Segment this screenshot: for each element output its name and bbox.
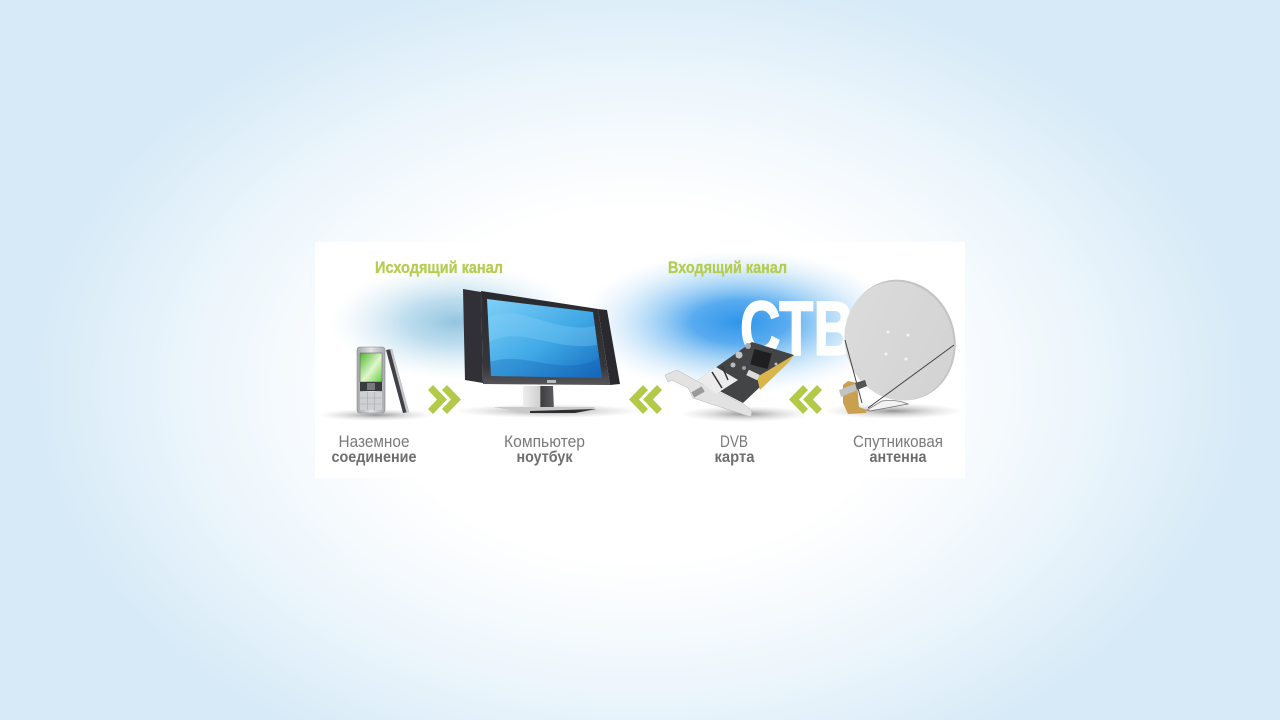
icon: satellite dish xyxy=(834,280,956,418)
label: computer notebook xyxy=(505,436,584,466)
arrow: right chevrons xyxy=(428,385,461,414)
large label: СТВ: СТВ xyxy=(740,286,854,372)
icon: mobile phone xyxy=(327,346,426,420)
icon: DVB card xyxy=(665,342,810,422)
label: landline connection xyxy=(332,436,416,466)
label: landline connection: соединение xyxy=(332,449,417,466)
label: DVB card xyxy=(716,436,755,466)
arrow: left chevrons xyxy=(789,385,822,414)
label: satellite antenna: Спутниковая xyxy=(853,432,943,451)
label: DVB card: карта xyxy=(714,449,755,466)
label: DVB card: DVB xyxy=(720,432,748,451)
icon: desktop monitor xyxy=(463,289,628,417)
label: satellite antenna xyxy=(854,436,942,462)
panel: diagram xyxy=(315,242,971,478)
label: computer notebook: Компьютер xyxy=(504,432,585,451)
label: computer notebook: ноутбук xyxy=(516,449,573,466)
glow: incoming channel xyxy=(598,256,866,386)
arrow: left chevrons xyxy=(629,385,662,414)
heading: incoming channel: Входящий канал xyxy=(668,258,787,277)
label: satellite antenna: антенна xyxy=(870,449,927,466)
glow: outgoing channel xyxy=(347,272,554,372)
label: landline connection: Наземное xyxy=(338,432,410,451)
heading: outgoing channel: Исходящий канал xyxy=(375,258,503,277)
